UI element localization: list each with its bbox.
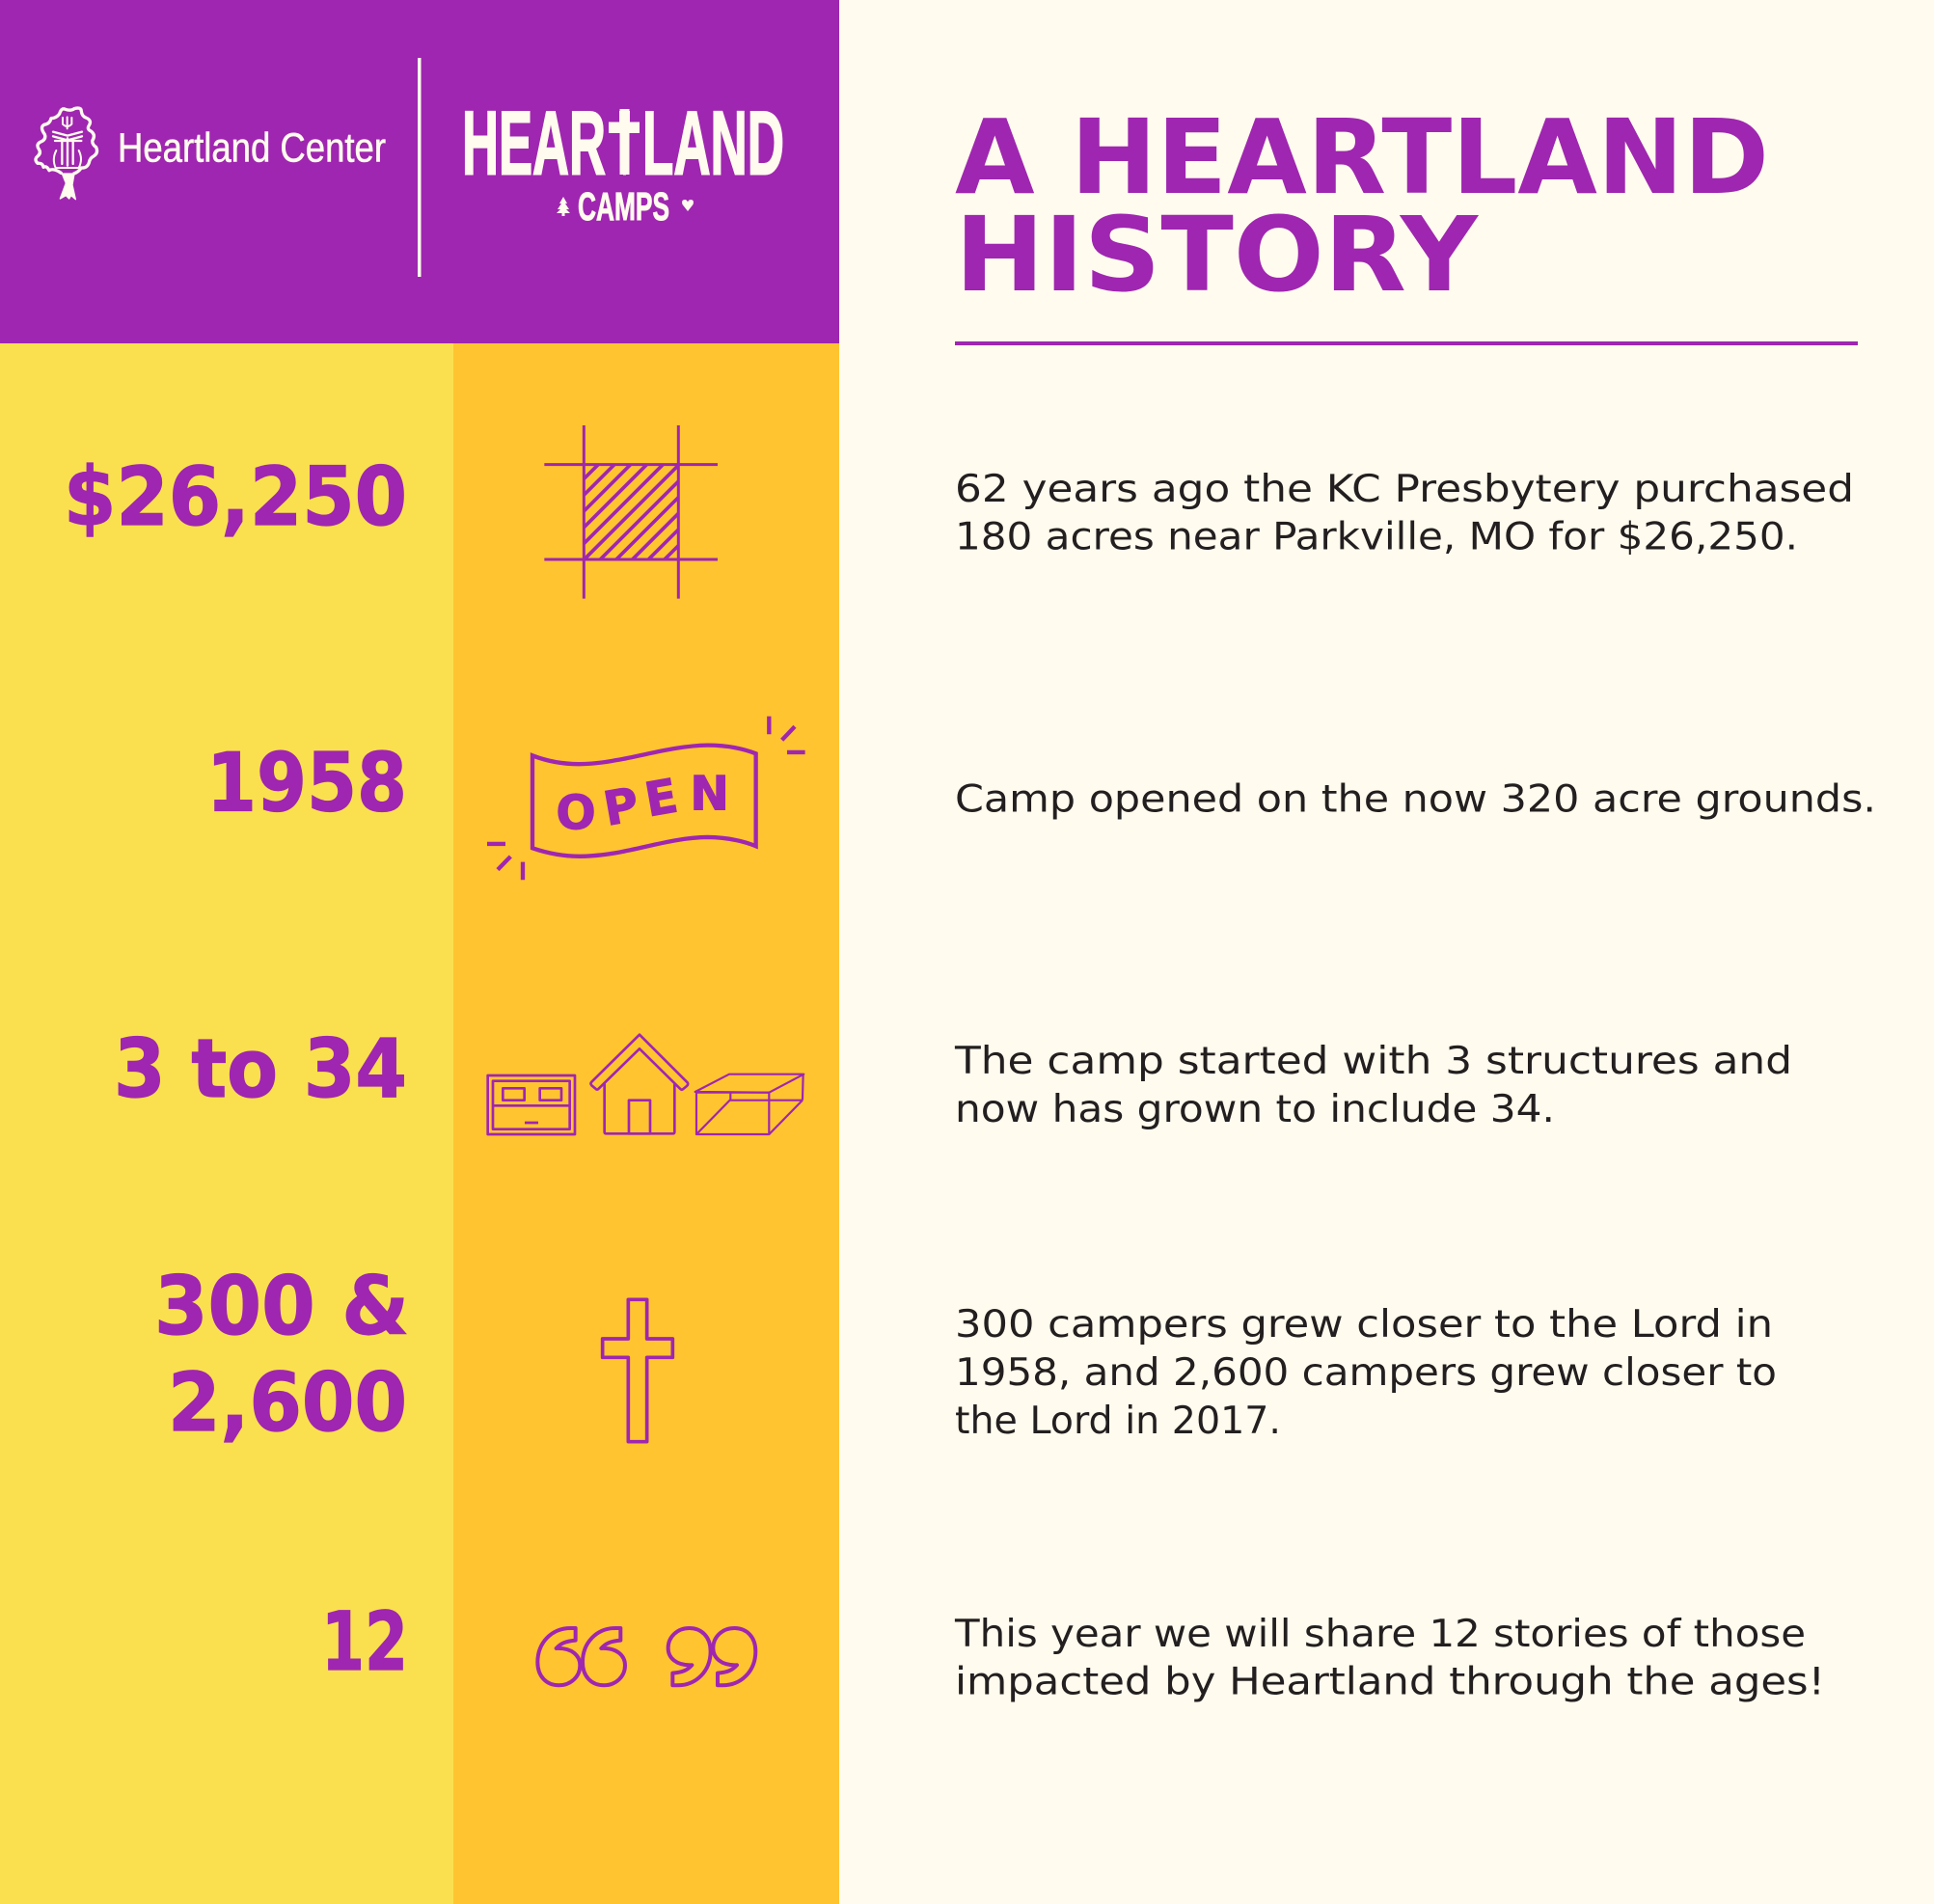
row 4: 300 & 2,600 number: 300 & [154, 1259, 409, 1353]
row 1 text [955, 467, 1854, 559]
panel: purple logo header [0, 0, 839, 343]
row 5 text: impacted by Heartland through the ages! [955, 1659, 1825, 1703]
divider between logos [418, 58, 421, 277]
text: HEARTLAND camps wordmark: T [619, 93, 630, 193]
icon: Heartland Center tree logo [36, 108, 97, 200]
row 4 text: 300 campers grew closer to the Lord in [955, 1302, 1773, 1346]
title underline [955, 341, 1858, 345]
icon: open banner [487, 717, 805, 880]
row 5: 12 number: 12 [321, 1594, 408, 1689]
icon: quotation marks [537, 1628, 755, 1685]
row 1 text: 62 years ago the KC Presbytery purchased [955, 467, 1854, 511]
icon: land plot [544, 425, 718, 599]
row 2: 1958 number: 1958 [206, 735, 407, 830]
icon: pine tree [557, 197, 570, 216]
row 3 text [954, 1039, 1792, 1131]
row 2 text: Camp opened on the now 320 acre grounds. [955, 777, 1876, 822]
text: Heartland Center wordmark: Heartland Center [118, 125, 386, 172]
title: HISTORY [955, 196, 1480, 315]
panel: orange icons column [453, 343, 839, 1904]
row 3 text: now has grown to include 34. [955, 1087, 1555, 1131]
row 4: 300 & 2,600 number [154, 1259, 409, 1450]
icon: cross [603, 1299, 672, 1442]
row 5 text [954, 1612, 1825, 1703]
row 1: $26,250 number: $26,250 [64, 449, 407, 544]
row 1 text: 180 acres near Parkville, MO for $26,250. [955, 515, 1798, 559]
row 4 text [955, 1302, 1777, 1443]
icon: three structures [488, 1035, 804, 1134]
text: CAMPS: CAMPS [578, 184, 669, 229]
row 4 text: 1958, and 2,600 campers grew closer to [955, 1350, 1777, 1395]
title: A HEARTLAND [955, 98, 1769, 218]
row 3: 3 to 34 number: 3 to 34 [114, 1021, 407, 1116]
row 4: 300 & 2,600 number: 2,600 [168, 1355, 407, 1450]
row 5 text: This year we will share 12 stories of those [954, 1612, 1806, 1656]
text: OPEN: OPEN [556, 767, 729, 840]
panel: yellow numbers column [0, 343, 453, 1904]
title [955, 98, 1769, 315]
icon: heart [682, 200, 694, 211]
text: HEARTLAND camps wordmark: LAND [642, 93, 784, 193]
text: HEARTLAND camps wordmark: HEAR [462, 93, 606, 193]
panel: cream background [839, 0, 1934, 1904]
row 3 text: The camp started with 3 structures and [954, 1039, 1792, 1083]
row 4 text: the Lord in 2017. [955, 1399, 1281, 1443]
